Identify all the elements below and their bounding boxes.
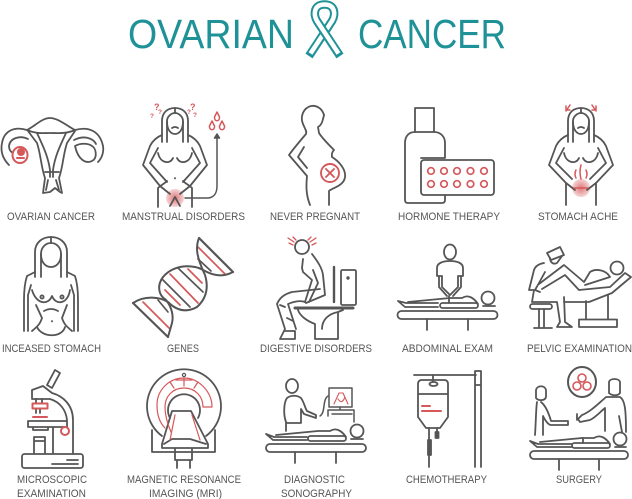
panel: hormone therapy — [398, 108, 500, 223]
icon: woman — [143, 108, 207, 207]
label: STOMACH ACHE — [538, 211, 618, 223]
label: ABDOMINAL EXAM — [402, 343, 493, 355]
icon: doctor on stool — [529, 247, 572, 328]
title — [128, 4, 506, 57]
icon: woman — [549, 108, 613, 205]
label: HORMONE THERAPY — [398, 211, 500, 223]
label: MICROSCOPIC — [17, 474, 87, 486]
label: NEVER PREGNANT — [270, 211, 360, 223]
icon: surgical lamp — [568, 367, 596, 397]
panel: pelvic examination — [527, 247, 632, 355]
icon: tumour — [12, 147, 28, 163]
icon: uterus and ovaries — [1, 118, 103, 193]
panel: surgery — [530, 367, 628, 486]
title: OVARIAN — [128, 11, 294, 57]
panel: never pregnant — [270, 106, 360, 223]
icon: pain glow — [572, 179, 590, 197]
icon: dna helix — [133, 238, 233, 337]
label: OVARIAN CANCER — [7, 211, 95, 223]
panel: microscopic examination — [17, 370, 87, 499]
panel: stomach ache — [538, 105, 618, 223]
icon: pain glow — [166, 189, 184, 207]
panel: inceased stomach — [2, 237, 101, 355]
icon: red parts — [32, 404, 69, 435]
icon: cross mark — [321, 164, 339, 182]
icon: ultrasound image — [334, 393, 348, 404]
icon: dna red rungs — [143, 247, 225, 329]
icon: doctor — [437, 244, 463, 303]
icon: patient and table — [398, 292, 498, 330]
icon: microscope — [22, 370, 83, 468]
icon: pregnant silhouette — [289, 106, 345, 205]
title: CANCER — [358, 11, 506, 57]
icon: person on toilet — [277, 240, 325, 339]
panel: mri — [127, 369, 241, 499]
label: DIGESTIVE DISORDERS — [260, 343, 372, 355]
label: INCEASED STOMACH — [2, 343, 101, 355]
icon: red ring — [157, 378, 212, 440]
panel: manstrual disorders — [122, 102, 245, 223]
icon: sonographer — [284, 379, 316, 431]
icon: question marks: ? — [193, 112, 197, 119]
icon: patient and table — [530, 432, 628, 470]
icon: surgeons — [535, 379, 626, 435]
icon: pills — [428, 168, 487, 187]
icon: ribbon — [309, 4, 340, 56]
icon: question marks: ? — [150, 113, 154, 120]
icon: arrow up — [185, 134, 220, 198]
icon: woman — [24, 237, 78, 335]
icon: liquid level — [422, 406, 441, 411]
icon: iv bag — [418, 375, 448, 467]
label: DIAGNOSTIC — [284, 474, 345, 486]
icon: toilet — [295, 267, 356, 339]
panel: chemotherapy — [406, 371, 487, 486]
icon: question marks — [150, 102, 197, 120]
icon: question marks: ? — [158, 109, 162, 116]
panel: genes — [133, 238, 233, 355]
icon: pain marks — [288, 237, 316, 245]
label: GENES — [167, 343, 199, 355]
icon: patient and table — [266, 424, 366, 463]
icon: cramps — [566, 105, 596, 188]
label: MAGNETIC RESONANCE — [127, 474, 241, 486]
icon: monitor — [320, 388, 354, 422]
label: MANSTRUAL DISORDERS — [122, 211, 245, 223]
icon: blood drops — [209, 112, 225, 130]
label: CHEMOTHERAPY — [406, 474, 487, 486]
icon: question marks: ? — [190, 102, 196, 112]
icon: chair and patient — [539, 262, 631, 327]
panel: ovarian cancer — [1, 118, 103, 223]
icon: iv stand — [414, 371, 481, 467]
label: SURGERY — [556, 474, 602, 486]
icon: question marks: ? — [154, 102, 160, 112]
icon: blister pack — [421, 160, 494, 195]
icon: bottle — [405, 108, 445, 203]
panel: abdominal exam — [398, 244, 498, 355]
icon: scanner — [147, 369, 221, 468]
icon: lamp bulbs — [573, 374, 591, 390]
panel: diagnostic sonography — [266, 379, 366, 499]
panel: digestive disorders — [260, 237, 372, 355]
icon: question marks: ? — [187, 109, 191, 116]
